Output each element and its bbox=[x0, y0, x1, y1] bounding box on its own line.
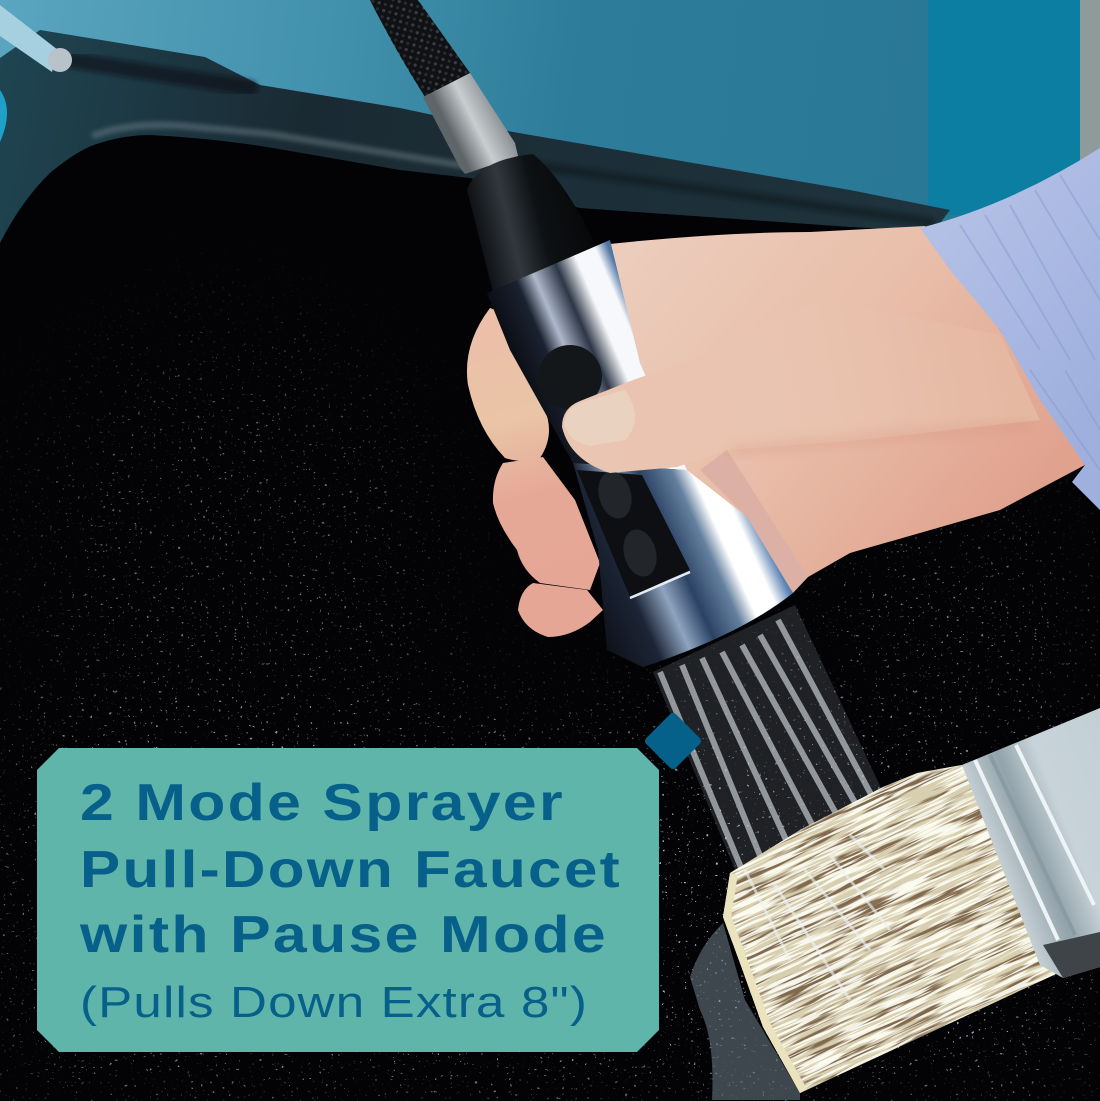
water spray bbox=[653, 605, 882, 885]
fingers behind sprayer bbox=[467, 308, 603, 637]
callout heading line 1: 2 Mode Sprayer bbox=[80, 774, 565, 832]
background wall bbox=[0, 0, 1100, 240]
thumb crease bbox=[730, 425, 1030, 452]
pause button bbox=[538, 345, 602, 409]
ferrule bbox=[962, 708, 1100, 978]
foam at bristle tips bbox=[690, 923, 800, 1100]
ring finger bbox=[518, 583, 603, 637]
bristles bbox=[720, 765, 1060, 1093]
hand palm bbox=[600, 226, 1085, 590]
rocker dimple 2 bbox=[618, 526, 662, 580]
thumb bbox=[562, 298, 1040, 473]
index finger bbox=[467, 308, 549, 461]
callout bbox=[37, 717, 697, 1052]
basin speckle bbox=[0, 260, 1100, 1101]
hose bbox=[370, 0, 470, 97]
callout subheading: (Pulls Down Extra 8") bbox=[80, 978, 588, 1027]
faucet handle bbox=[0, 5, 72, 142]
thumbnail bbox=[564, 390, 635, 446]
callout panel bbox=[37, 748, 659, 1052]
rim highlight bbox=[70, 60, 930, 222]
sink rim bbox=[0, 30, 950, 300]
callout heading line 3: with Pause Mode bbox=[79, 906, 608, 964]
rocker dimple 1 bbox=[593, 468, 637, 522]
callout heading line 2: Pull-Down Faucet bbox=[80, 841, 622, 899]
paint brush bbox=[720, 708, 1100, 1093]
chrome upper body bbox=[487, 240, 687, 470]
ferrule ribs bbox=[975, 745, 1094, 940]
sprayer head bbox=[487, 240, 808, 667]
hose ferrule bbox=[423, 73, 518, 174]
ferrule dark corner bbox=[1043, 932, 1100, 978]
callout diamond bbox=[649, 717, 697, 765]
rocker lower edge bbox=[630, 572, 690, 598]
middle finger bbox=[493, 457, 600, 590]
palm reflection on chrome bbox=[700, 450, 808, 593]
chrome lower body bbox=[573, 463, 793, 667]
water on bristles bbox=[745, 835, 890, 1000]
rocker switch bbox=[577, 470, 690, 597]
sleeve bbox=[920, 148, 1100, 510]
sprayer neck bbox=[467, 154, 597, 292]
